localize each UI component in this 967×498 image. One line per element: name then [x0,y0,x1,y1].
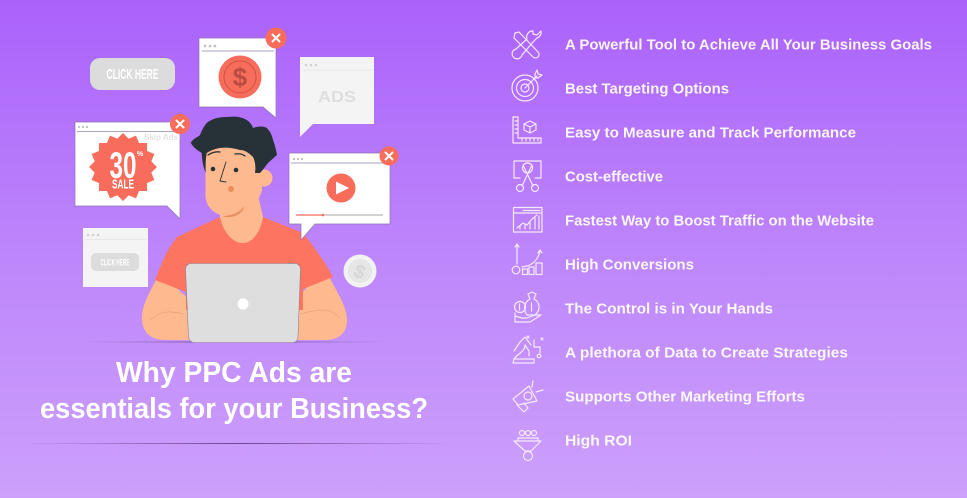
neck and face [220,195,263,243]
illustration: person with ads [75,28,398,342]
text: high roi: High ROI [565,432,632,450]
ad window: ADS: ADS [318,89,356,106]
text: marketing efforts: Supports Other Marketing Efforts [565,388,805,406]
ad window: 30% sale: 30 [110,145,136,186]
hair [191,117,277,173]
icon: funnel [514,430,541,460]
ad window: 30% sale: SALE [112,178,134,192]
person [142,117,347,342]
ad window: 30% sale [75,114,190,219]
title underline [22,443,456,444]
list of benefits [512,31,932,461]
ad window: ADS [300,57,374,137]
arms [142,276,190,340]
text: powerful tool: A Powerful Tool to Achieve All Your Business Goals [565,36,932,54]
icon: conversion curve [512,244,542,274]
title: Why PPC Ads are [116,357,352,389]
ground line [84,342,386,343]
icon: chess knight [513,336,543,363]
ad window: 30% sale: Skip Ads [144,133,179,142]
shirt [155,217,333,310]
ad window: video [289,146,398,240]
icon: target [512,70,542,101]
ad window: 30% sale: % [137,151,144,158]
text: cost effective: Cost-effective [565,168,663,186]
icon: ruler and cube [513,117,541,143]
ad window: dollar [199,28,286,118]
ad window: click here small [83,228,148,287]
icon: megaphone [513,381,543,412]
text: plethora of data: A plethora of Data to Create Strategies [565,344,848,362]
button: click here [90,58,175,90]
text: measure: Easy to Measure and Track Performance [565,124,856,142]
button: click here: CLICK HERE [106,66,158,83]
coin: $ [350,261,369,284]
title: essentials for your Business? [40,393,428,425]
eyes, brows, nose, mouth [208,152,245,192]
icon: crossed tools [512,31,541,59]
title [40,357,428,425]
laptop [186,264,300,342]
text: conversions: High Conversions [565,256,694,274]
icon: money and scissors [514,161,541,192]
text: boost traffic: Fastest Way to Boost Traffic on the Website [565,212,874,230]
ad window: click here small: CLICK HERE [100,258,130,268]
text: control: The Control is in Your Hands [565,300,773,318]
text: targeting: Best Targeting Options [565,80,729,98]
icon: browser chart [514,208,542,232]
ad window: dollar: $ [233,62,248,92]
coin [344,254,376,288]
icon: money in hand [514,292,541,322]
